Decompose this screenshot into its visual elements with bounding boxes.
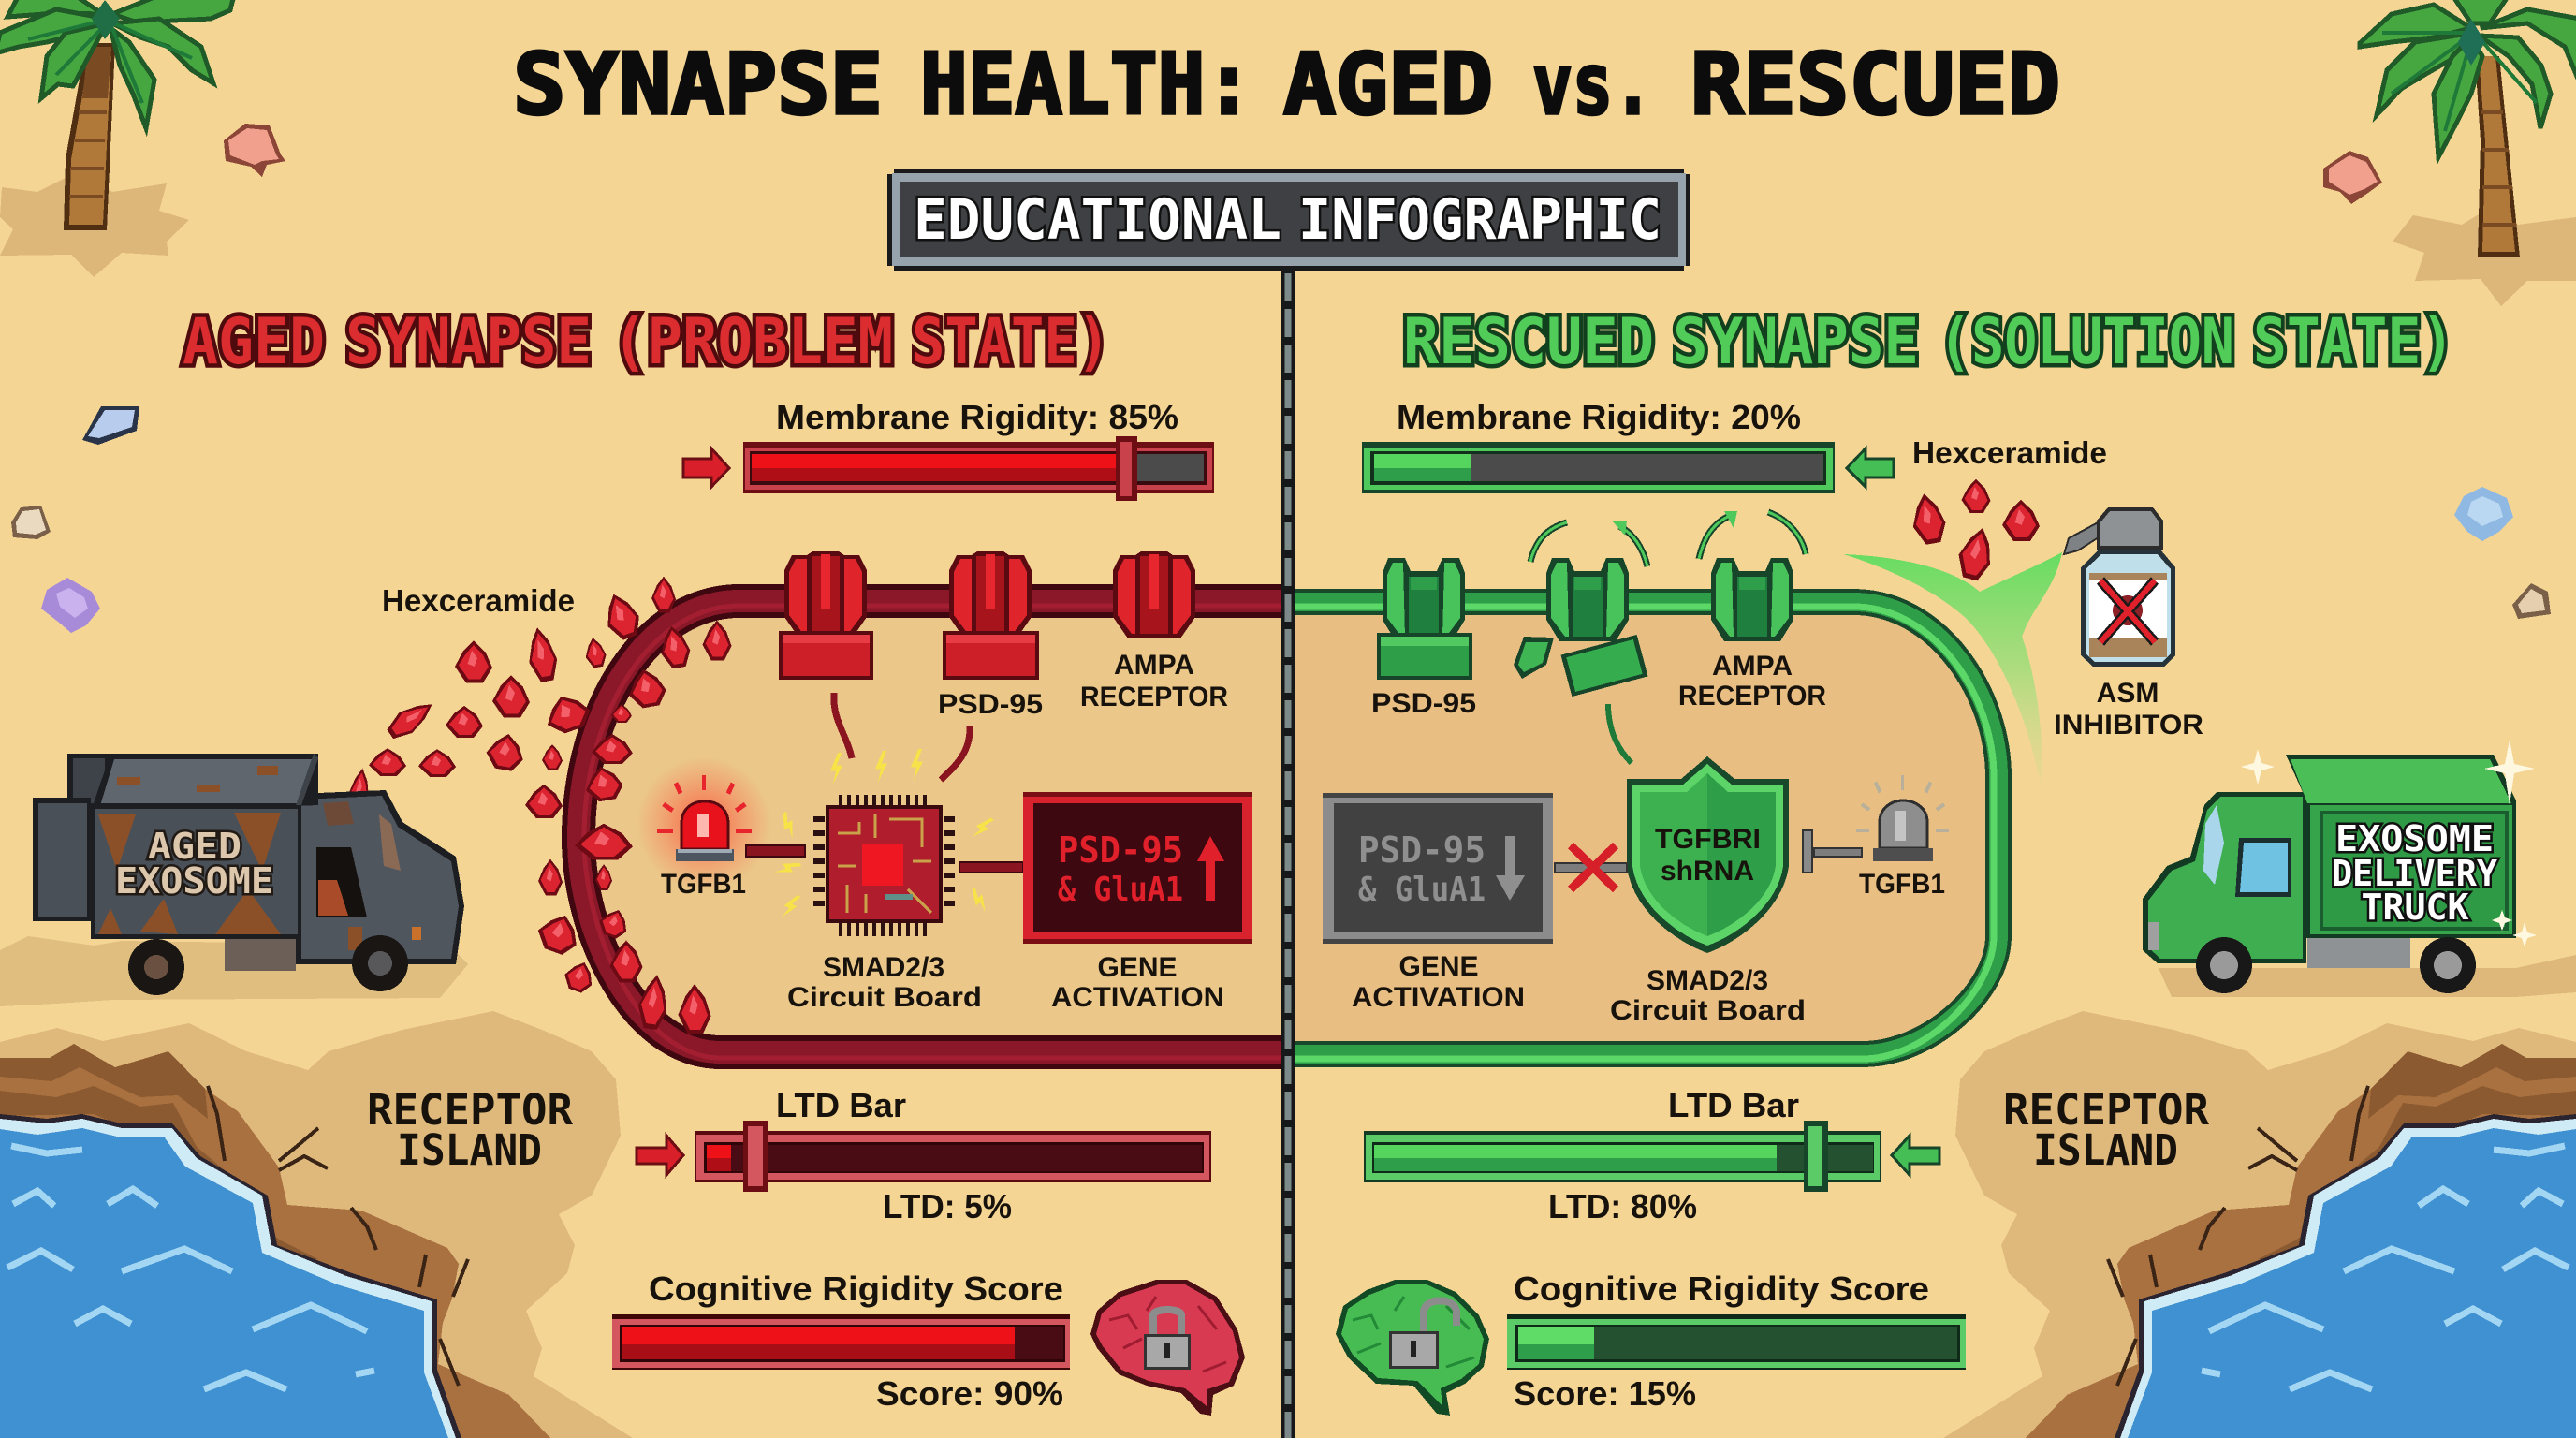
receptor broken away <box>1514 558 1648 697</box>
panel: aged synapse membrane <box>578 601 1281 1058</box>
label: gene activation aged <box>1051 952 1224 1013</box>
truck: aged exosome <box>0 754 468 1006</box>
sparkles <box>2241 740 2537 947</box>
right receptor island coast <box>1943 1011 2576 1438</box>
label: ampa receptor aged: RECEPTOR <box>1080 682 1228 712</box>
label: ampa receptor rescued: AMPA <box>1712 651 1793 682</box>
label: gene activation rescued: GENE <box>1398 951 1479 982</box>
shell: tan right <box>2512 583 2551 619</box>
label: receptor island right: ISLAND <box>2033 1125 2178 1175</box>
asm inhibitor bottle <box>2064 507 2175 667</box>
arrow: ltd red <box>637 1136 683 1175</box>
title: RESCUED <box>1690 36 2060 134</box>
shield: tgfbri shrna <box>1627 756 1789 953</box>
bar: cognitive aged <box>612 1314 1070 1370</box>
right palm tree <box>2360 0 2576 306</box>
label: ltd 5: LTD: 5% <box>883 1187 1012 1225</box>
heading: aged synapse <box>183 305 1110 379</box>
label: ltd 80: LTD: 80% <box>1548 1187 1697 1225</box>
gene box text rescued: PSD-95 <box>1358 829 1486 871</box>
label: ampa receptor rescued <box>1678 651 1826 712</box>
label: gene activation aged: ACTIVATION <box>1051 982 1224 1013</box>
bar: ltd rescued <box>1364 1121 1881 1192</box>
label: cognitive rigidity aged: Cognitive Rigidity Score <box>649 1269 1063 1308</box>
brain unlocked <box>1336 1280 1489 1416</box>
wheels rescued <box>2196 937 2476 993</box>
heading: rescued synapse: SYNAPSE <box>1673 305 1919 379</box>
bar: membrane rigidity 20 <box>1362 442 1835 493</box>
heading: aged synapse: STATE) <box>912 305 1110 379</box>
truck cargo rescued <box>2286 755 2516 968</box>
connector tgfb1 to chip <box>746 845 805 857</box>
label: ampa receptor aged <box>1080 650 1228 712</box>
label: asm inhibitor <box>2054 678 2203 741</box>
label: ampa receptor aged: AMPA <box>1114 650 1194 681</box>
shield text: shRNA <box>1661 856 1754 887</box>
heading: rescued synapse <box>1403 305 2454 379</box>
truck text rescued <box>2332 818 2497 928</box>
ampa receptor rescued <box>1711 558 1793 641</box>
label: psd-95 aged: PSD-95 <box>938 689 1043 720</box>
arrow up <box>1197 836 1224 901</box>
label: hexceramide left: Hexceramide <box>382 583 575 618</box>
label: gene activation aged: GENE <box>1097 952 1178 983</box>
hexceramide crystals right <box>1908 479 2040 583</box>
badge text: INFOGRAPHIC <box>1298 187 1661 253</box>
label: membrane rigidity 85: Membrane Rigidity: 85% <box>776 398 1178 436</box>
label: smad2/3 rescued <box>1610 965 1806 1026</box>
truck text rescued: TRUCK <box>2361 887 2469 928</box>
heading: rescued synapse: (SOLUTION <box>1939 305 2234 379</box>
connector chip to gene box <box>959 862 1023 873</box>
arrow: membrane green <box>1847 448 1894 487</box>
gene activation box rescued <box>1323 793 1553 944</box>
badge text: EDUCATIONAL <box>914 187 1281 253</box>
label: score 15: Score: 15% <box>1514 1374 1696 1413</box>
truck text rescued: DELIVERY <box>2332 853 2497 894</box>
truck cab rescued <box>2143 792 2306 963</box>
title: AGED <box>1283 36 1493 134</box>
spray plume <box>1844 552 2062 786</box>
label: ltd bar aged: LTD Bar <box>776 1086 906 1124</box>
label: tgfb1 rescued: TGFB1 <box>1859 869 1945 900</box>
label: asm inhibitor: INHIBITOR <box>2054 710 2203 741</box>
truck text aged: EXOSOME <box>115 860 273 902</box>
label: cognitive rigidity rescued: Cognitive Rigidity Score <box>1514 1269 1929 1308</box>
label: gene activation rescued <box>1352 951 1525 1013</box>
left receptor island coast <box>0 1011 633 1438</box>
chip: smad2/3 circuit board <box>819 800 949 930</box>
center divider <box>1281 267 1295 1438</box>
bar: cognitive rescued <box>1507 1314 1966 1370</box>
label: smad2/3 rescued: Circuit Board <box>1610 995 1806 1026</box>
label: smad2/3 aged: Circuit Board <box>787 982 982 1013</box>
gene box text aged <box>1058 829 1183 909</box>
hexceramide crystals left <box>346 577 732 1034</box>
heading: aged synapse: AGED <box>183 305 325 379</box>
inhibition t-bar <box>1803 830 1862 873</box>
title: SYNAPSE <box>513 36 883 134</box>
shell: blue left <box>82 406 139 445</box>
shell: tan left <box>11 506 51 539</box>
signal line rescued <box>1608 704 1632 763</box>
label: receptor island left: RECEPTOR <box>367 1085 574 1135</box>
heading: aged synapse: (PROBLEM <box>612 305 893 379</box>
heading: rescued synapse: RESCUED <box>1403 305 1654 379</box>
gray connector with red x <box>1555 845 1627 889</box>
shield text: TGFBRI <box>1655 824 1761 855</box>
arrow: membrane red <box>683 448 729 487</box>
truck text aged: AGED <box>148 826 242 867</box>
title: vs. <box>1532 36 1653 134</box>
shield text <box>1655 824 1761 887</box>
gene box text rescued: & GluA1 <box>1358 871 1486 909</box>
sparks around chip <box>773 749 995 921</box>
label: gene activation rescued: ACTIVATION <box>1352 982 1525 1013</box>
arrow: ltd green <box>1892 1136 1939 1175</box>
heading: rescued synapse: STATE) <box>2253 305 2454 379</box>
label: receptor island left: ISLAND <box>397 1125 542 1175</box>
badge text <box>914 187 1661 253</box>
label: ampa receptor rescued: RECEPTOR <box>1678 681 1826 712</box>
gene box text rescued <box>1358 829 1486 909</box>
bar: membrane rigidity 85 <box>743 436 1214 501</box>
psd-95 receptor 1 aged <box>779 551 873 680</box>
panel: rescued synapse membrane <box>1295 602 1998 1059</box>
heading: aged synapse: SYNAPSE <box>345 305 592 379</box>
siren: tgfb1 aged <box>637 756 771 891</box>
shell: pink left <box>224 124 285 177</box>
label: tgfb1 aged: TGFB1 <box>661 869 746 900</box>
brain locked <box>1090 1280 1245 1416</box>
label: smad2/3 aged: SMAD2/3 <box>823 952 944 983</box>
signal lines aged <box>834 693 970 780</box>
title: HEALTH: <box>920 36 1252 134</box>
shell: blue right <box>2454 487 2513 541</box>
shell: pink right <box>2323 151 2382 204</box>
subtitle badge <box>887 169 1690 271</box>
gene box text aged: PSD-95 <box>1058 829 1183 871</box>
bar: ltd aged <box>695 1121 1211 1192</box>
truck text aged <box>115 826 273 902</box>
label: smad2/3 aged <box>787 952 982 1013</box>
trafficking arrows <box>1530 511 1806 566</box>
label: receptor island left <box>367 1085 574 1175</box>
label: receptor island right: RECEPTOR <box>2003 1085 2210 1135</box>
label: receptor island right <box>2003 1085 2210 1175</box>
ampa receptor aged <box>1113 551 1195 638</box>
psd-95 receptor rescued <box>1377 558 1472 680</box>
label: asm inhibitor: ASM <box>2097 678 2159 709</box>
gene activation box aged <box>1023 792 1252 944</box>
label: hexceramide right: Hexceramide <box>1912 435 2107 470</box>
shell: purple <box>41 578 100 633</box>
label: smad2/3 rescued: SMAD2/3 <box>1647 965 1768 996</box>
gene box text aged: & GluA1 <box>1058 871 1183 909</box>
label: psd-95 rescued: PSD-95 <box>1371 688 1476 719</box>
left palm tree <box>0 0 234 277</box>
truck: exosome delivery truck <box>2143 740 2576 997</box>
psd-95 receptor 2 aged <box>943 551 1039 680</box>
label: score 90: Score: 90% <box>876 1374 1063 1413</box>
label: ltd bar rescued: LTD Bar <box>1668 1086 1799 1124</box>
truck cargo aged <box>33 754 318 939</box>
siren: tgfb1 rescued <box>1856 775 1949 861</box>
truck text rescued: EXOSOME <box>2335 818 2494 859</box>
title <box>513 36 2060 134</box>
wheels aged <box>128 935 408 995</box>
truck cab aged <box>296 790 464 964</box>
label: membrane rigidity 20: Membrane Rigidity: 20% <box>1397 398 1801 436</box>
arrow down <box>1496 836 1525 901</box>
